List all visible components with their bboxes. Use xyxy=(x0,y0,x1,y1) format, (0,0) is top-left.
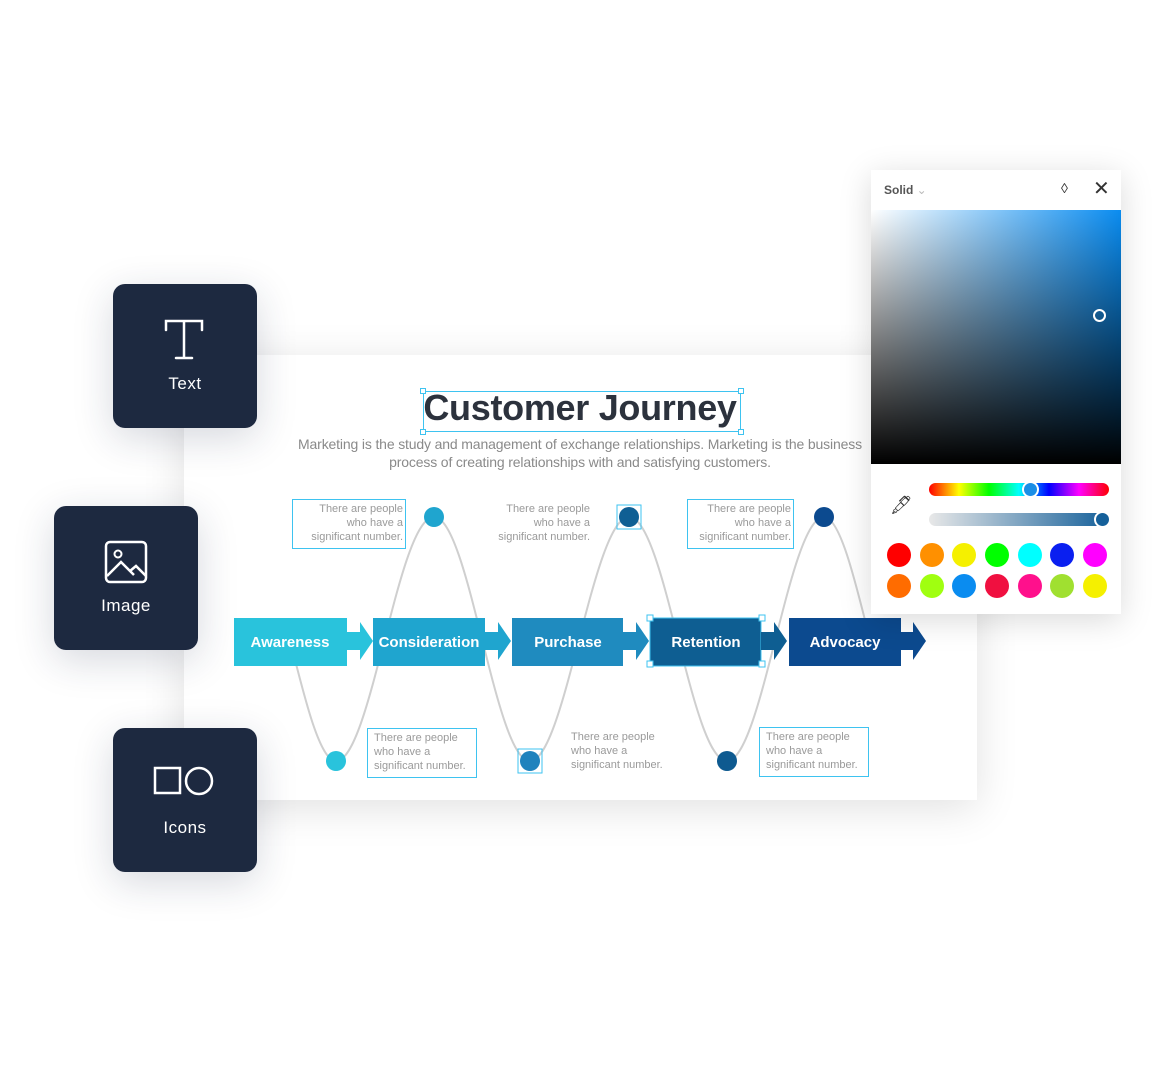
note bottom 3: There are people xyxy=(766,731,850,743)
card: Image: Image xyxy=(101,596,151,615)
slide xyxy=(184,355,977,800)
card: Icons: Icons xyxy=(163,818,207,837)
hue slider xyxy=(929,483,1109,496)
stage: Advocacy xyxy=(789,618,926,666)
note top 1: significant number. xyxy=(311,531,403,543)
note bottom 3 xyxy=(759,727,869,777)
note bottom 1 xyxy=(367,728,477,778)
icon: image xyxy=(104,540,148,584)
stage: Advocacy: Advocacy xyxy=(810,634,881,651)
note top 2: There are people xyxy=(506,503,590,515)
card: Image xyxy=(54,506,198,650)
subtitle: Marketing is the study and management of exchange relationships. Marketing is the business xyxy=(298,436,862,452)
note top 1 xyxy=(292,499,406,549)
stage: Awareness: Awareness xyxy=(251,634,329,651)
note bottom 1: who have a xyxy=(374,746,430,758)
note bottom 2: significant number. xyxy=(571,759,663,771)
alpha slider xyxy=(929,513,1109,526)
title selection box xyxy=(423,391,741,432)
title: Customer Journey xyxy=(423,387,737,428)
subtitle xyxy=(298,436,862,470)
card: Text: Text xyxy=(168,374,202,393)
color picker panel: ✕ xyxy=(1093,178,1110,200)
note top 3: who have a xyxy=(735,517,791,529)
color picker panel xyxy=(871,170,1121,614)
note bottom 2: There are people xyxy=(571,731,655,743)
card: Text xyxy=(113,284,257,428)
note top 1: There are people xyxy=(319,503,403,515)
note top 3: significant number. xyxy=(699,531,791,543)
note top 1: who have a xyxy=(347,517,403,529)
stage: Awareness xyxy=(234,618,373,666)
stage: Purchase xyxy=(512,618,649,666)
eyedropper: 🖋 xyxy=(890,495,913,515)
note bottom 3: significant number. xyxy=(766,759,858,771)
note bottom 1: There are people xyxy=(374,732,458,744)
icon: T xyxy=(164,320,204,360)
note top 3: There are people xyxy=(707,503,791,515)
note top 2 xyxy=(498,503,590,543)
note bottom 3: who have a xyxy=(766,745,822,757)
stage: Retention: Retention xyxy=(671,634,741,651)
note top 3 xyxy=(687,499,794,549)
stage: Purchase: Purchase xyxy=(534,634,602,651)
stage: Consideration: Consideration xyxy=(379,634,479,651)
card: Icons xyxy=(113,728,257,872)
dots xyxy=(326,505,834,773)
gradient area xyxy=(871,210,1121,464)
icon: shapes xyxy=(154,766,214,796)
icon: drop and close: ◊ xyxy=(1061,180,1068,196)
subtitle: process of creating relationships with and satisfying customers. xyxy=(389,454,771,470)
stage: Consideration xyxy=(373,618,511,666)
wave curve xyxy=(290,517,870,761)
note top 2: who have a xyxy=(534,517,590,529)
swatches xyxy=(887,543,1107,598)
note bottom 2: who have a xyxy=(571,745,627,757)
note bottom 2 xyxy=(571,731,663,771)
note top 2: significant number. xyxy=(498,531,590,543)
stage: Retention xyxy=(647,615,787,667)
header: Solid ⌄ xyxy=(884,183,927,197)
note bottom 1: significant number. xyxy=(374,760,466,772)
